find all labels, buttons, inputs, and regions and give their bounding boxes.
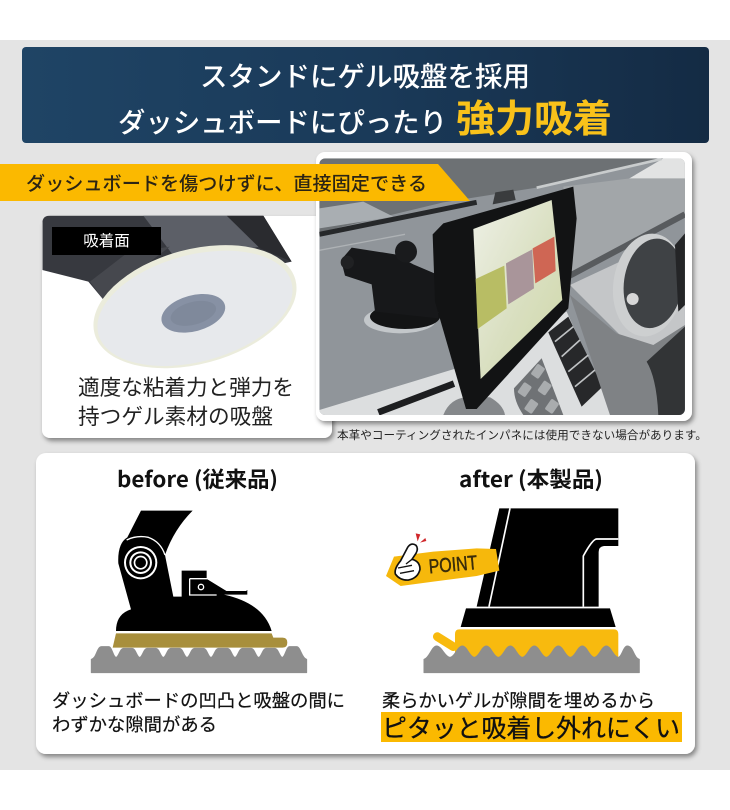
heading highlight: 強力吸着 [456, 99, 612, 141]
diagram: before [91, 511, 307, 673]
caption: gel material: 適度な粘着力と弾力を [78, 376, 294, 400]
icon: pointing hand [395, 533, 426, 580]
highlighted claim: ピタッと吸着し外れにくい [382, 715, 680, 743]
label: adhesive face [52, 227, 161, 255]
heading line 2: ダッシュボードにぴったり [118, 107, 447, 138]
heading: before: before (従来品) [117, 463, 278, 494]
caption: gel material: 持つゲル素材の吸盤 [78, 405, 273, 429]
point tag [386, 533, 499, 586]
text: before explanation: ダッシュボードの凹凸と吸盤の間に [52, 691, 345, 711]
photo: gel suction cup [42, 216, 296, 368]
panel: before and after comparison [36, 453, 695, 754]
banner text: ダッシュボードを傷つけずに、直接固定できる [26, 173, 427, 195]
footnote: 本革やコーティングされたインパネには使用できない場合があります。 [337, 428, 707, 442]
panel: dashboard photo [316, 152, 692, 421]
heading line 1: スタンドにゲル吸盤を採用 [200, 61, 530, 92]
photo: navigation unit on dashboard [319, 158, 690, 415]
panel: suction cup photo [42, 216, 332, 438]
label: adhesive face: 吸着面 [83, 232, 130, 250]
point label: POINT [428, 552, 478, 578]
caption: gel material [78, 376, 294, 429]
text: before explanation: わずかな隙間がある [52, 715, 217, 735]
text: after explanation: 柔らかいゲルが隙間を埋めるから [382, 691, 655, 711]
header panel [22, 47, 709, 143]
yellow banner [0, 164, 470, 201]
diagram: after [386, 508, 639, 673]
heading: after: after (本製品) [459, 463, 603, 494]
text: before explanation [52, 691, 345, 735]
